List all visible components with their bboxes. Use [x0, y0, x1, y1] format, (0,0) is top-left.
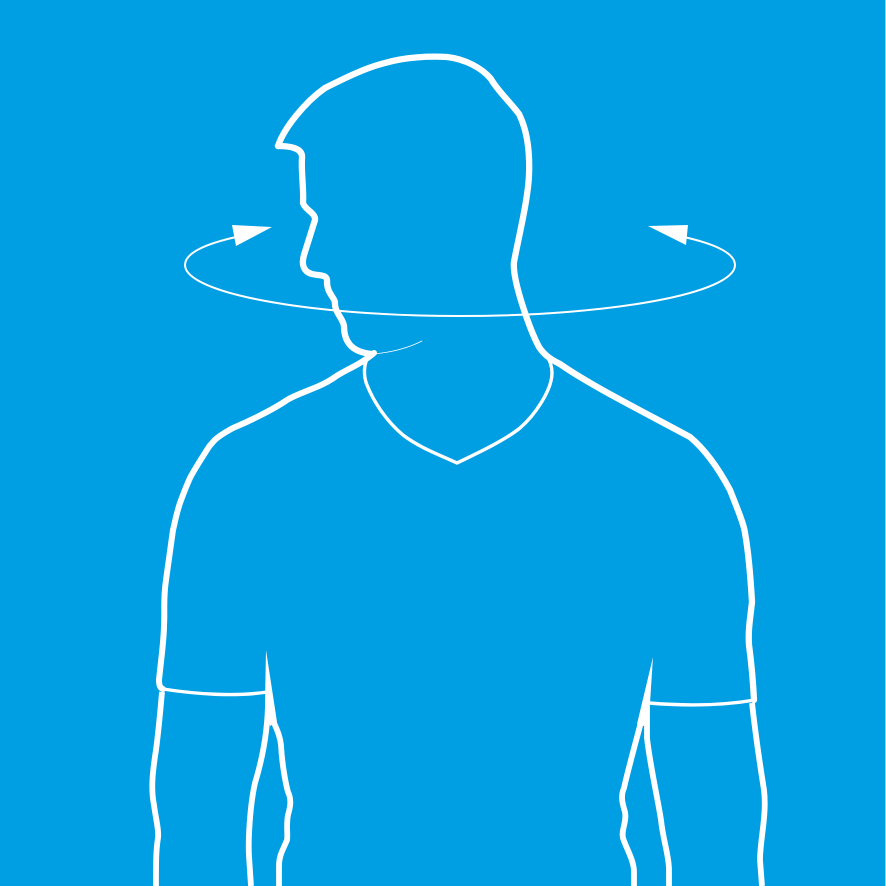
right torso edge — [622, 722, 641, 886]
left forearm outer — [152, 692, 162, 886]
shirt neckline — [364, 354, 552, 463]
jaw line — [372, 341, 422, 354]
face profile — [278, 146, 372, 354]
left torso edge — [272, 718, 290, 886]
left shoulder and sleeve — [159, 353, 374, 689]
right sleeve cuff — [649, 700, 755, 705]
right armpit wedge — [637, 657, 653, 726]
left rotation arrowhead — [232, 225, 272, 246]
rotation ellipse arc — [185, 237, 735, 316]
left sleeve cuff — [163, 689, 267, 695]
right rotation arrowhead — [648, 225, 688, 245]
head and right shoulder outline — [278, 57, 754, 700]
figure outline — [152, 57, 765, 886]
right forearm outer — [752, 703, 765, 886]
left forearm inner — [249, 700, 268, 886]
left armpit wedge — [265, 650, 277, 726]
right forearm inner — [647, 703, 669, 886]
